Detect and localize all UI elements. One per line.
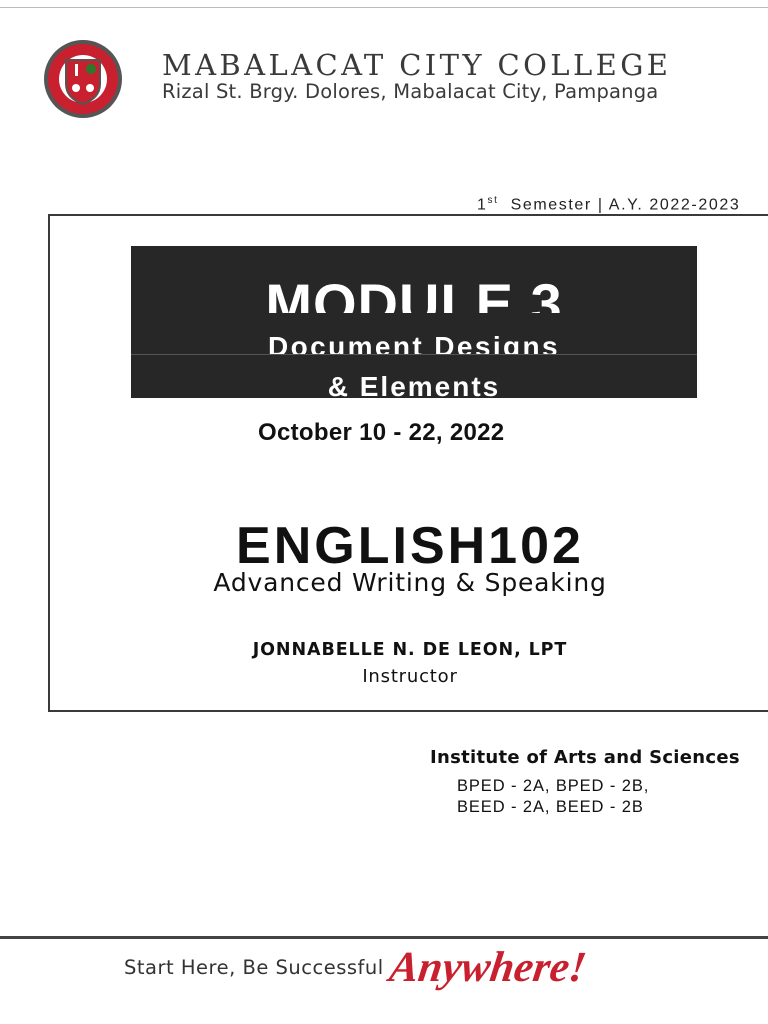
semester label: 1st Semester | A.Y. 2022-2023 [477, 195, 740, 213]
college name: MABALACAT CITY COLLEGE [162, 48, 671, 82]
footer tagline: Anywhere! [387, 944, 589, 991]
title block: module [131, 246, 697, 398]
instructor role: Instructor [362, 666, 458, 687]
address: Rizal St. Brgy. Dolores, Mabalacat City, Pampanga [162, 80, 658, 103]
sections [457, 777, 649, 816]
date: October 10 - 22, 2022 [258, 419, 504, 446]
course title: Advanced Writing & Speaking [213, 568, 607, 597]
panel: main cover box [48, 214, 768, 712]
course code: ENGLISH102 [236, 517, 584, 575]
sections: BPED - 2A, BPED - 2B, [457, 777, 649, 795]
icon: college seal [44, 40, 122, 118]
instructor name: JONNABELLE N. DE LEON, LPT [253, 640, 567, 660]
sections: BEED - 2A, BEED - 2B [457, 798, 644, 816]
footer tagline: Start Here, Be Successful [124, 956, 384, 979]
footer tagline [124, 944, 589, 991]
institute: Institute of Arts and Sciences [430, 747, 740, 768]
header: college logo and name [44, 40, 671, 118]
